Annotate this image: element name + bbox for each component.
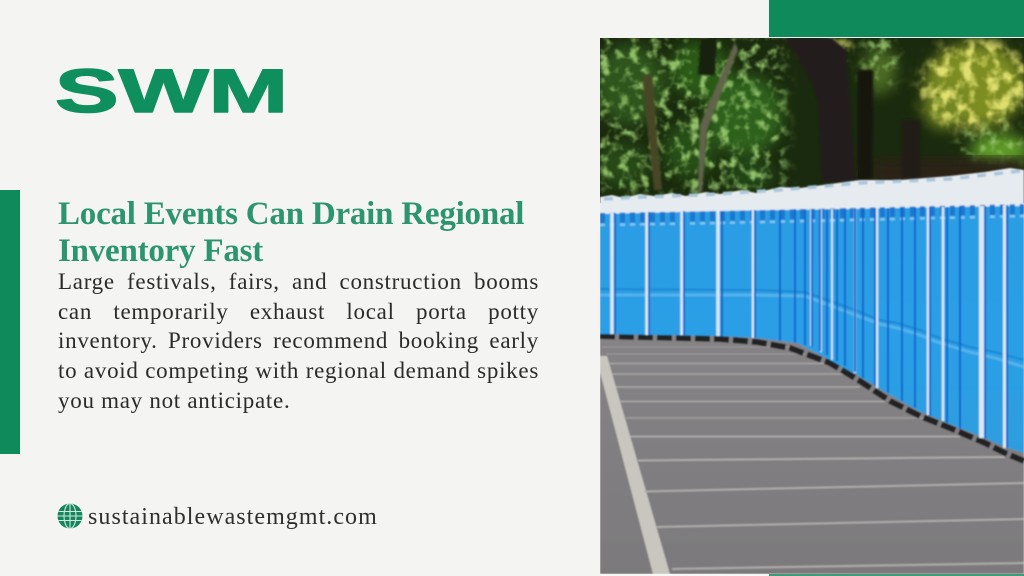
top-right green accent bar — [769, 0, 1024, 37]
body text — [58, 269, 539, 413]
heading: Inventory Fast — [58, 233, 263, 269]
tree trunks — [642, 38, 920, 192]
white roofs — [600, 168, 1024, 214]
parking lines — [600, 356, 670, 574]
door edge shadows — [615, 205, 1007, 448]
website address: sustainablewastemgmt.com — [88, 504, 378, 530]
door panel rail — [600, 289, 1024, 360]
door posts — [612, 205, 1005, 448]
door top vents — [600, 209, 1024, 218]
portable toilets — [600, 168, 1024, 461]
background under the trees — [872, 158, 1024, 186]
ground — [600, 330, 1024, 574]
heading: Local Events Can Drain Regional — [58, 196, 524, 232]
body text: you may not anticipate. — [58, 388, 290, 413]
trees — [594, 38, 1024, 203]
bottom green accent sliver — [769, 574, 1024, 576]
blue walls — [600, 204, 1024, 453]
foliage mottling — [600, 38, 1024, 203]
roof vents — [604, 171, 1020, 199]
body text: can temporarily exhaust local porta potty — [58, 299, 539, 324]
body text: Large festivals, fairs, and construction booms — [58, 269, 539, 294]
icon: globe — [58, 503, 82, 529]
left green accent bar — [0, 190, 20, 454]
white strip below photo — [600, 574, 769, 576]
body text: to avoid competing with regional demand spikes — [58, 358, 539, 383]
heading — [58, 196, 524, 269]
shadow at base — [600, 336, 1024, 461]
photo: row of blue portable toilets in a parking lot — [600, 38, 1024, 574]
body text: inventory. Providers recommend booking early — [58, 328, 539, 353]
